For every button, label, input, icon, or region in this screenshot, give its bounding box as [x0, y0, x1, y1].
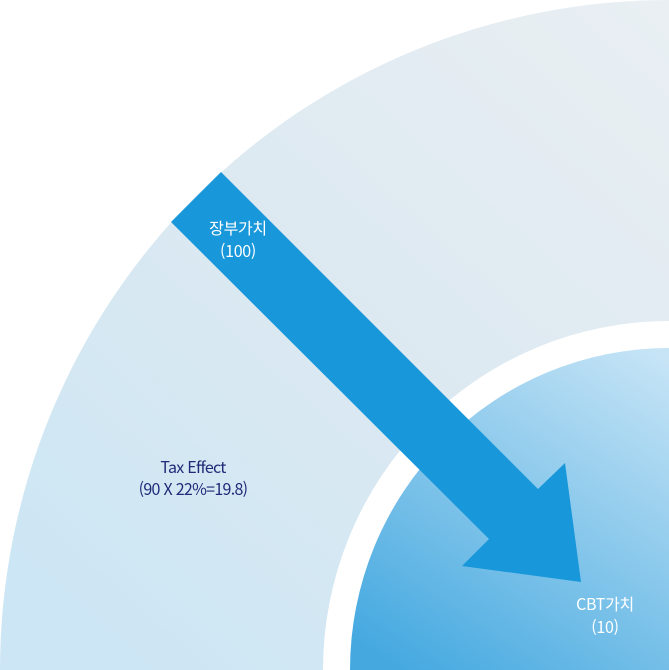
label: book value: (100) [220, 238, 256, 262]
label: CBT value [576, 591, 634, 638]
label: tax effect: (90 X 22%=19.8) [139, 476, 247, 500]
white ring gap [323, 321, 669, 670]
label: book value: 장부가치 [209, 215, 267, 239]
label: book value [209, 215, 267, 262]
inner quarter circle: CBT [350, 348, 669, 670]
arrow [171, 172, 581, 582]
label: tax effect [139, 454, 247, 500]
label: tax effect: Tax Effect [160, 454, 226, 478]
label: CBT value: CBT가치 [576, 591, 634, 615]
label: CBT value: (10) [591, 614, 619, 638]
